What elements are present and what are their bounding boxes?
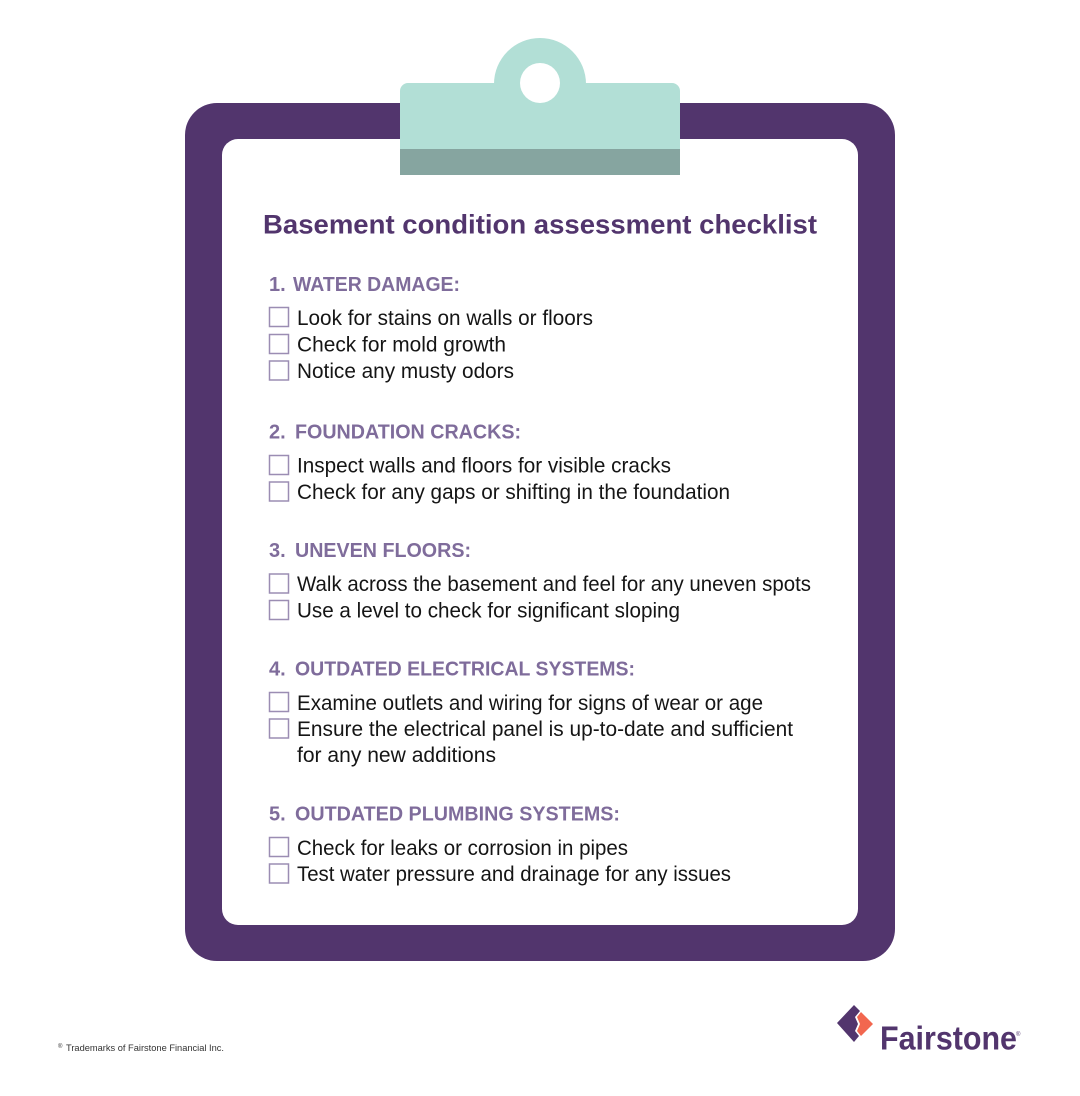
checklist item: Look for stains on walls or floors [297, 307, 593, 330]
checklist item: Test water pressure and drainage for any issues [297, 863, 731, 886]
section 3: uneven floors [269, 540, 811, 622]
trademark footnote: Trademarks of Fairstone Financial Inc. [66, 1043, 224, 1054]
icon: clipboard clip [400, 38, 680, 175]
heading: outdated electrical systems: OUTDATED ELECTRICAL SYSTEMS: [295, 658, 635, 680]
checklist item: Examine outlets and wiring for signs of wear or age [297, 692, 763, 715]
checklist item: Use a level to check for significant sloping [297, 600, 680, 622]
heading: water damage: WATER DAMAGE: [293, 274, 460, 296]
section 5: outdated plumbing systems [269, 804, 731, 886]
icon: Fairstone diamond [837, 1005, 873, 1042]
heading: outdated plumbing systems: 5. [269, 804, 286, 826]
title: Basement condition assessment checklist [263, 210, 817, 240]
checklist item: for any new additions [297, 744, 496, 767]
heading: uneven floors: UNEVEN FLOORS: [295, 540, 471, 562]
logo: Fairstone [837, 1005, 1021, 1058]
panel: clipboard board [185, 103, 895, 961]
wordmark: Fairstone [880, 1020, 1017, 1058]
checklist item: Inspect walls and floors for visible cracks [297, 454, 671, 478]
checklist item: Check for any gaps or shifting in the foundation [297, 481, 730, 504]
checklist item: Walk across the basement and feel for any uneven spots [297, 573, 811, 596]
heading: foundation cracks: 2. [269, 422, 286, 444]
heading: water damage: 1. [269, 274, 286, 296]
heading: outdated electrical systems: 4. [269, 658, 286, 680]
checklist item: Check for mold growth [297, 334, 506, 356]
section 1: water damage [269, 274, 593, 383]
trademark footnote: ® [58, 1043, 63, 1050]
checklist item: Notice any musty odors [297, 360, 514, 383]
registered mark: ® [1016, 1031, 1021, 1038]
checklist item [270, 718, 793, 767]
checklist item: Check for leaks or corrosion in pipes [297, 837, 628, 860]
heading: outdated plumbing systems: OUTDATED PLUMBING SYSTEMS: [295, 804, 620, 826]
heading: uneven floors: 3. [269, 540, 286, 562]
checklist item: Ensure the electrical panel is up-to-date and sufficient [297, 718, 793, 741]
section 2: foundation cracks [269, 422, 730, 504]
section 4: outdated electrical systems [269, 658, 793, 767]
heading: foundation cracks: FOUNDATION CRACKS: [295, 422, 521, 444]
